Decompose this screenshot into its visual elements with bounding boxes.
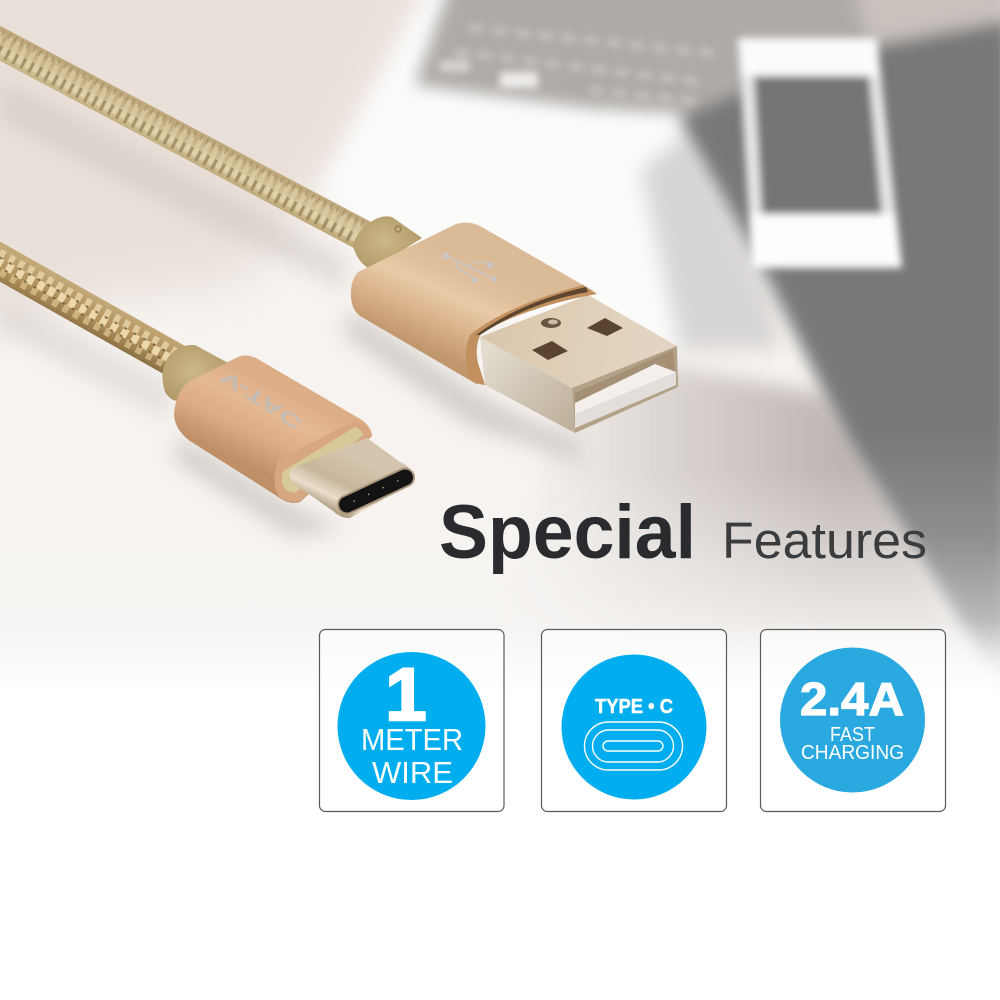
feature card: 1 meter wire [320,630,504,812]
icon: type-c port [584,722,682,770]
collar logo [395,226,401,232]
metal housing [351,222,597,385]
brand mark: V-TAC [217,367,305,434]
dark panel [679,20,1000,710]
collar ring [282,427,363,493]
housing front ring [274,420,372,502]
housing rim [466,285,597,385]
beige desk area [0,0,460,320]
title: Features [722,512,927,569]
type-c port [334,464,418,518]
plug front opening [572,346,678,433]
braided cable: upper [0,26,372,248]
title [439,490,927,575]
metal housing [174,356,372,503]
usb logo [443,253,496,282]
feature card: 2.4A fast charging: 2.4A [800,673,904,725]
shadow wedge [500,358,960,650]
braided cable: lower [0,247,185,376]
strain relief collar [162,345,230,401]
plug side [480,337,575,433]
feature card: 2.4A fast charging [760,630,946,812]
top right band [850,0,1000,46]
feature card: 1 meter wire: 1 [385,653,427,736]
plug holes [587,318,623,336]
blurred keys [455,28,720,102]
feature card: 2.4A fast charging: FAST [830,724,875,746]
wedge fade [0,470,1000,700]
title: Special [439,490,696,575]
metal plug [289,438,413,518]
blurred phone [738,38,902,268]
laptop white surface [318,0,760,350]
strain relief collar [353,216,422,270]
feature card: 2.4A fast charging: CHARGING [801,742,904,764]
plug top [480,295,677,388]
fade to white [0,620,1000,695]
keyboard area [415,0,900,116]
feature card: 1 meter wire: WIRE [372,755,453,790]
feature card: 1 meter wire: METER [361,722,463,757]
cable shadows [0,80,585,535]
surface shading [640,130,780,350]
USB-C connector [162,345,418,518]
feature card: type-c [542,630,726,812]
USB-A connector [351,216,678,433]
feature card: type-c: TYPE • C [595,696,673,718]
